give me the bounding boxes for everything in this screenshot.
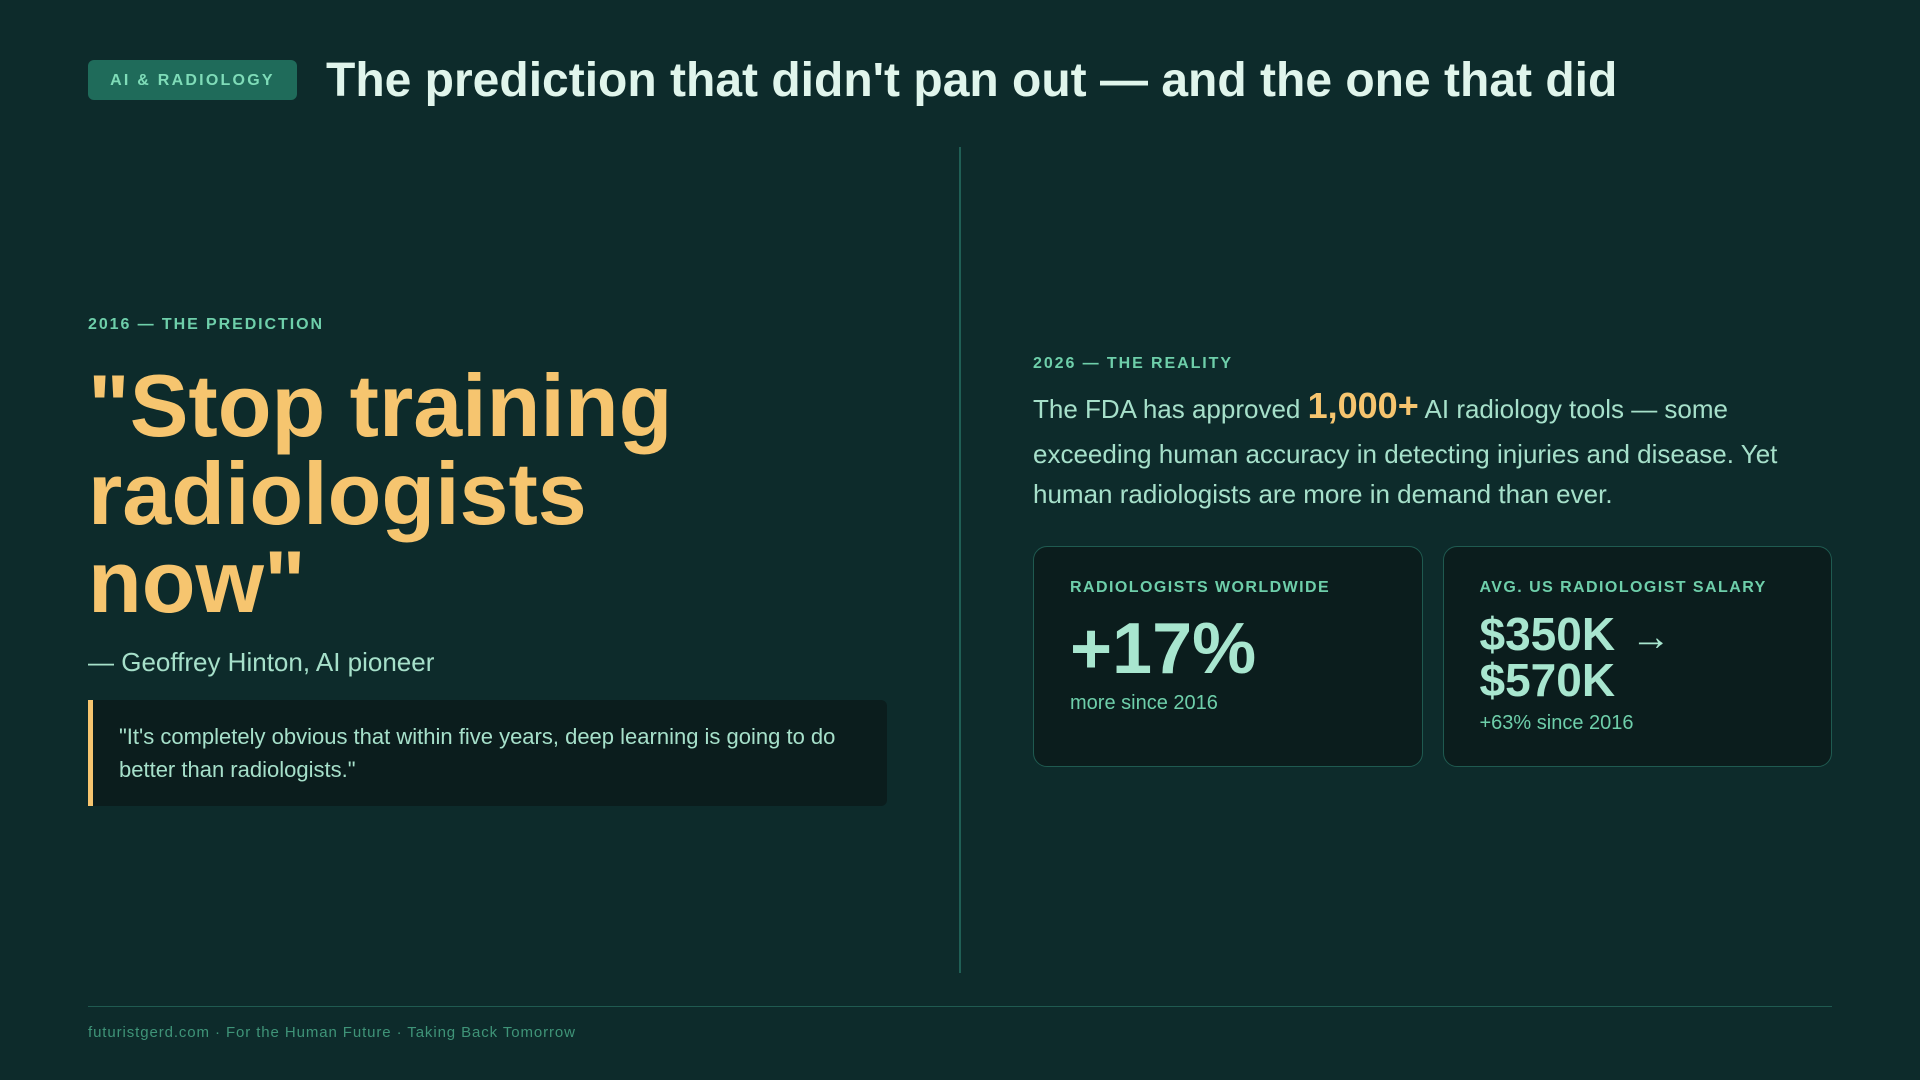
title: The prediction that didn't pan out — and the one that did — [326, 54, 1617, 107]
stat value: +17% — [1070, 609, 1256, 689]
quote text — [119, 724, 835, 782]
eyebrow: 2026: 2026 — THE REALITY — [1033, 355, 1233, 372]
eyebrow: 2016: 2016 — THE PREDICTION — [88, 316, 324, 333]
headline quote: "Stop training — [88, 356, 672, 455]
panel: 2026 reality — [1033, 355, 1778, 509]
quote text: better than radiologists." — [119, 757, 356, 782]
tag: AI & Radiology — [88, 60, 297, 100]
stat label: RADIOLOGISTS WORLDWIDE — [1070, 579, 1330, 596]
reality paragraph: exceeding human accuracy in detecting injuries and disease. Yet — [1033, 439, 1777, 469]
headline quote: now" — [88, 532, 306, 631]
vertical divider — [959, 147, 961, 973]
reality paragraph — [1033, 385, 1778, 509]
stat note: more since 2016 — [1070, 692, 1218, 714]
reality paragraph: The FDA has approved 1,000+ AI radiology tools — some — [1033, 385, 1728, 426]
footer text: futuristgerd.com · For the Human Future · Taking Back Tomorrow — [88, 1024, 576, 1041]
stat value: $350K → — [1480, 608, 1671, 660]
stat value — [1480, 608, 1671, 706]
stat label: AVG. US RADIOLOGIST SALARY — [1480, 579, 1767, 596]
headline quote — [88, 356, 672, 631]
panel: 2016 prediction — [88, 316, 887, 806]
headline quote: radiologists — [88, 444, 587, 543]
quote callout — [88, 700, 887, 806]
attribution: — Geoffrey Hinton, AI pioneer — [88, 647, 434, 677]
stat card: salary — [1442, 546, 1832, 767]
stat value: $570K — [1480, 654, 1615, 706]
tag: AI & Radiology: AI & RADIOLOGY — [110, 72, 275, 89]
reality paragraph: human radiologists are more in demand than ever. — [1033, 479, 1613, 509]
stat card: radiologists worldwide — [1033, 546, 1422, 767]
quote text: "It's completely obvious that within five years, deep learning is going to do — [119, 724, 835, 749]
footer rule — [88, 1006, 1832, 1007]
stat note: +63% since 2016 — [1480, 712, 1634, 734]
